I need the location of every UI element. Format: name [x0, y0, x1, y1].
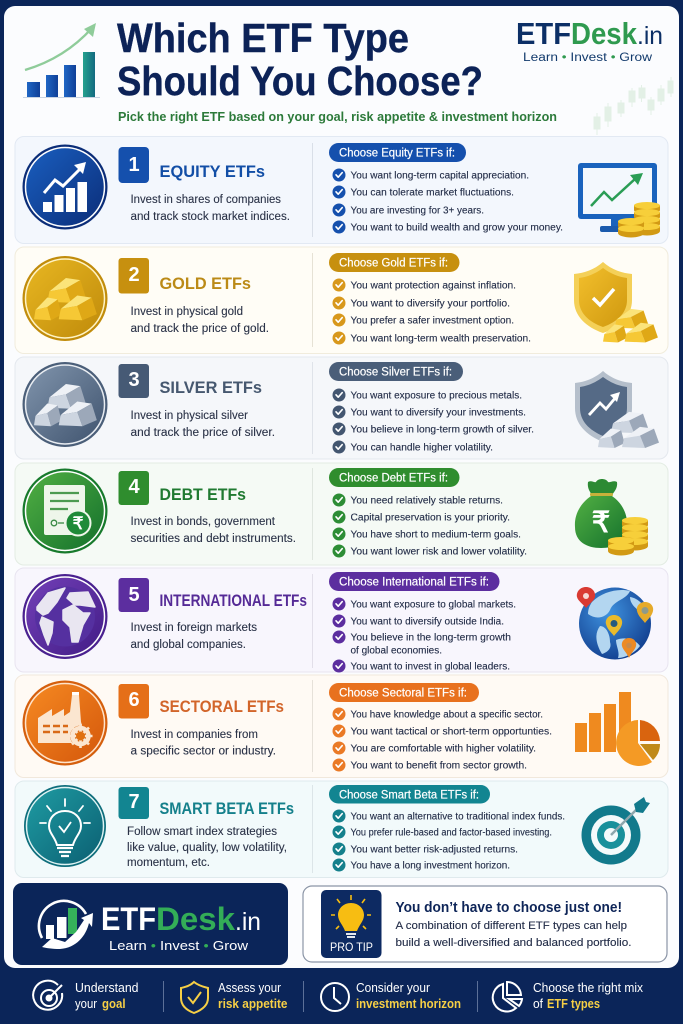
icon: bars and pie chart — [575, 692, 660, 766]
number badge 6: 6 — [128, 689, 140, 711]
description — [127, 826, 287, 869]
logo: ETFDesk.in: Desk — [571, 16, 638, 51]
panel: gold ETFs — [15, 247, 668, 354]
checklist — [332, 810, 565, 872]
heading: debt ETFs: DEBT ETFs — [160, 485, 246, 504]
pill: choose gold: Choose Gold ETFs if: — [339, 258, 448, 270]
panel: silver ETFs — [15, 357, 668, 459]
description: momentum, etc. — [127, 857, 210, 869]
description — [130, 516, 296, 545]
description: and track stock market indices. — [130, 211, 290, 223]
icon: silver shield with bars — [575, 371, 659, 448]
checklist: You want exposure to global markets. — [350, 600, 516, 610]
description: Invest in foreign markets — [130, 622, 257, 634]
checklist: You need relatively stable returns. — [350, 496, 503, 506]
icon: equity chart badge — [22, 144, 108, 230]
logo wordmark: ETF — [101, 901, 156, 937]
pill: choose silver — [329, 362, 463, 381]
pro tip text: You don’t have to choose just one! — [396, 900, 622, 916]
footer: investment horizon: Consider your — [356, 981, 430, 995]
pill: choose international: Choose International ETFs if: — [339, 576, 489, 588]
heading: sectoral ETFs: SECTORAL ETFs — [160, 697, 284, 716]
footer: assess risk appetite — [181, 981, 288, 1013]
logo: ETFDesk.in — [516, 16, 663, 64]
footer: assess risk appetite: risk appetite — [218, 997, 288, 1011]
pill: choose silver: Choose Silver ETFs if: — [339, 366, 452, 378]
number badge 2 — [118, 258, 149, 294]
panel: smart beta ETFs — [15, 781, 668, 878]
logo: ETFDesk.in: .in — [637, 22, 663, 50]
number badge 1: 1 — [128, 154, 140, 176]
number badge 4 — [118, 471, 149, 505]
panel: pro tip — [303, 886, 667, 962]
footer strip — [33, 981, 644, 1013]
heading: smart beta ETFs: SMART BETA ETFs — [160, 799, 294, 818]
pill: choose smart beta: Choose Smart Beta ETFs if: — [339, 790, 479, 802]
icon: factory badge — [22, 680, 108, 766]
checklist — [332, 708, 552, 772]
panel: equity ETFs — [15, 136, 668, 244]
logo wordmark — [101, 901, 261, 953]
icon: gold shield with bars — [574, 262, 658, 342]
panel: sectoral ETFs — [15, 675, 668, 778]
footer: right mix: ETF types — [547, 997, 600, 1011]
logo: ETFDesk.in: Learn • Invest • Grow — [523, 52, 653, 64]
checklist: You want protection against inflation. — [350, 280, 516, 292]
checklist: You want long-term capital appreciation. — [350, 170, 529, 182]
heading: gold ETFs: GOLD ETFs — [160, 274, 251, 293]
decorative faint candlesticks — [594, 77, 673, 135]
number badge 3: 3 — [128, 369, 140, 391]
description: Invest in bonds, government — [130, 516, 276, 528]
number badge 6 — [118, 684, 149, 718]
description — [130, 410, 275, 439]
checklist: You can handle higher volatility. — [350, 442, 493, 454]
pill: choose sectoral: Choose Sectoral ETFs if: — [339, 688, 467, 700]
checklist: You want long-term wealth preservation. — [350, 334, 531, 344]
description: Invest in shares of companies — [130, 194, 281, 206]
number badge 4: 4 — [128, 476, 140, 498]
footer: investment horizon: investment horizon — [356, 997, 461, 1011]
number badge 7 — [118, 787, 149, 819]
checklist: You prefer rule-based and factor-based investing. — [350, 828, 552, 838]
description: securities and debt instruments. — [130, 533, 296, 545]
footer: right mix — [493, 981, 644, 1011]
number badge 2: 2 — [128, 264, 140, 286]
checklist: You want to build wealth and grow your money. — [350, 222, 563, 234]
pro tip text: build a well-diversified and balanced portfolio. — [396, 937, 632, 949]
checklist — [332, 388, 534, 454]
pill: choose international — [329, 572, 500, 591]
number badge 5: 5 — [128, 584, 140, 606]
icon: silver bars badge — [22, 362, 108, 447]
checklist: You want to diversify your portfolio. — [350, 298, 510, 310]
description: Invest in physical silver — [130, 410, 248, 422]
checklist: You want to diversify outside India. — [350, 616, 504, 628]
checklist: You have a long investment horizon. — [350, 860, 510, 872]
checklist: Capital preservation is your priority. — [350, 512, 510, 524]
checklist: You can tolerate market fluctuations. — [350, 188, 514, 198]
logo wordmark: Learn • Invest • Grow — [109, 938, 249, 953]
icon: globe badge — [22, 574, 108, 659]
checklist: You believe in the long-term growth — [350, 632, 511, 644]
title: Should You Choose? — [117, 58, 483, 104]
panel: international ETFs — [15, 568, 668, 672]
footer: right mix: Choose the right mix — [533, 981, 644, 995]
checklist: You want tactical or short-term opportunties. — [350, 726, 552, 738]
description: and track the price of silver. — [130, 427, 275, 439]
footer: right mix: of — [533, 997, 543, 1011]
icon: gold bars badge — [22, 256, 108, 341]
checklist: You want to benefit from sector growth. — [350, 760, 527, 772]
checklist — [332, 278, 531, 344]
heading: international ETFs: INTERNATIONAL ETFs — [160, 591, 307, 610]
checklist: You are investing for 3+ years. — [350, 206, 484, 216]
description: and global companies. — [130, 639, 246, 651]
pill: choose equity — [329, 143, 466, 162]
description: a specific sector or industry. — [130, 746, 276, 758]
icon: light bulb badge — [24, 785, 106, 867]
logo wordmark: Desk — [156, 901, 235, 937]
heading: silver ETFs: SILVER ETFs — [160, 378, 262, 397]
checklist: You have short to medium-term goals. — [350, 530, 521, 540]
icon: growth chart with arrow — [23, 23, 100, 98]
pill: choose debt — [329, 468, 460, 487]
panel: debt ETFs — [15, 463, 668, 565]
checklist — [332, 494, 527, 558]
checklist: You want exposure to precious metals. — [350, 390, 522, 402]
pill: choose smart beta — [329, 785, 490, 804]
footer: understand your goal — [33, 981, 139, 1011]
number badge 5 — [118, 578, 149, 612]
number badge 1 — [118, 147, 149, 183]
checklist: You are comfortable with higher volatility. — [350, 744, 536, 754]
icon: pro tip badge: PRO TIP — [330, 940, 373, 954]
description: Invest in physical gold — [130, 306, 243, 318]
icon: money bag with coins — [575, 479, 648, 556]
description: like value, quality, low volatility, — [127, 842, 287, 854]
number badge 3 — [118, 364, 149, 398]
title: Which ETF Type — [117, 15, 409, 61]
checklist: You want lower risk and lower volatility. — [350, 546, 527, 558]
description: Follow smart index strategies — [127, 826, 277, 838]
pill: choose equity: Choose Equity ETFs if: — [339, 148, 455, 160]
pro tip text: A combination of different ETF types can help — [396, 920, 627, 932]
checklist: You want to invest in global leaders. — [350, 662, 510, 672]
footer: assess risk appetite: Assess your — [218, 981, 281, 995]
footer: understand your goal: goal — [102, 997, 126, 1011]
pro tip text — [396, 900, 632, 949]
footer: understand your goal: your — [75, 997, 97, 1011]
description — [130, 729, 276, 758]
icon: globe with pins — [577, 587, 653, 660]
checklist: You prefer a safer investment option. — [350, 316, 514, 326]
checklist: You have knowledge about a specific sector. — [350, 710, 543, 720]
footer: understand your goal: Understand — [75, 981, 139, 995]
checklist: You want better risk-adjusted returns. — [350, 844, 518, 856]
footer: investment horizon — [321, 981, 461, 1011]
icon: target with arrow — [582, 797, 650, 864]
icon: monitor with coins — [578, 163, 660, 238]
checklist: You believe in long-term growth of silver. — [350, 424, 534, 436]
checklist — [332, 598, 516, 672]
checklist: You want to diversify your investments. — [350, 408, 526, 418]
description — [130, 194, 290, 223]
description — [130, 622, 257, 651]
icon: money bag with coins: ₹ — [592, 507, 610, 539]
subtitle: Pick the right ETF based on your goal, risk appetite & investment horizon — [118, 109, 557, 124]
title — [117, 15, 483, 104]
description — [130, 306, 269, 335]
pill: choose sectoral — [329, 683, 479, 702]
logo: ETFDesk.in: ETF — [516, 16, 571, 51]
pill: choose debt: Choose Debt ETFs if: — [339, 472, 448, 484]
description: and track the price of gold. — [130, 323, 269, 335]
checklist: of global economies. — [350, 646, 442, 656]
heading: equity ETFs: EQUITY ETFs — [160, 162, 265, 181]
icon: logo mark — [39, 901, 93, 949]
pill: choose gold — [329, 253, 460, 272]
number badge 7: 7 — [128, 791, 140, 813]
description: Invest in companies from — [130, 729, 258, 741]
checklist — [332, 168, 563, 234]
icon: pro tip badge — [321, 890, 382, 958]
icon: bond document badge: ₹ — [73, 514, 84, 533]
panel: bottom logo — [13, 883, 288, 965]
logo wordmark: .in — [235, 908, 261, 936]
icon: bond document badge — [22, 468, 108, 554]
checklist: You want an alternative to traditional index funds. — [350, 812, 565, 822]
